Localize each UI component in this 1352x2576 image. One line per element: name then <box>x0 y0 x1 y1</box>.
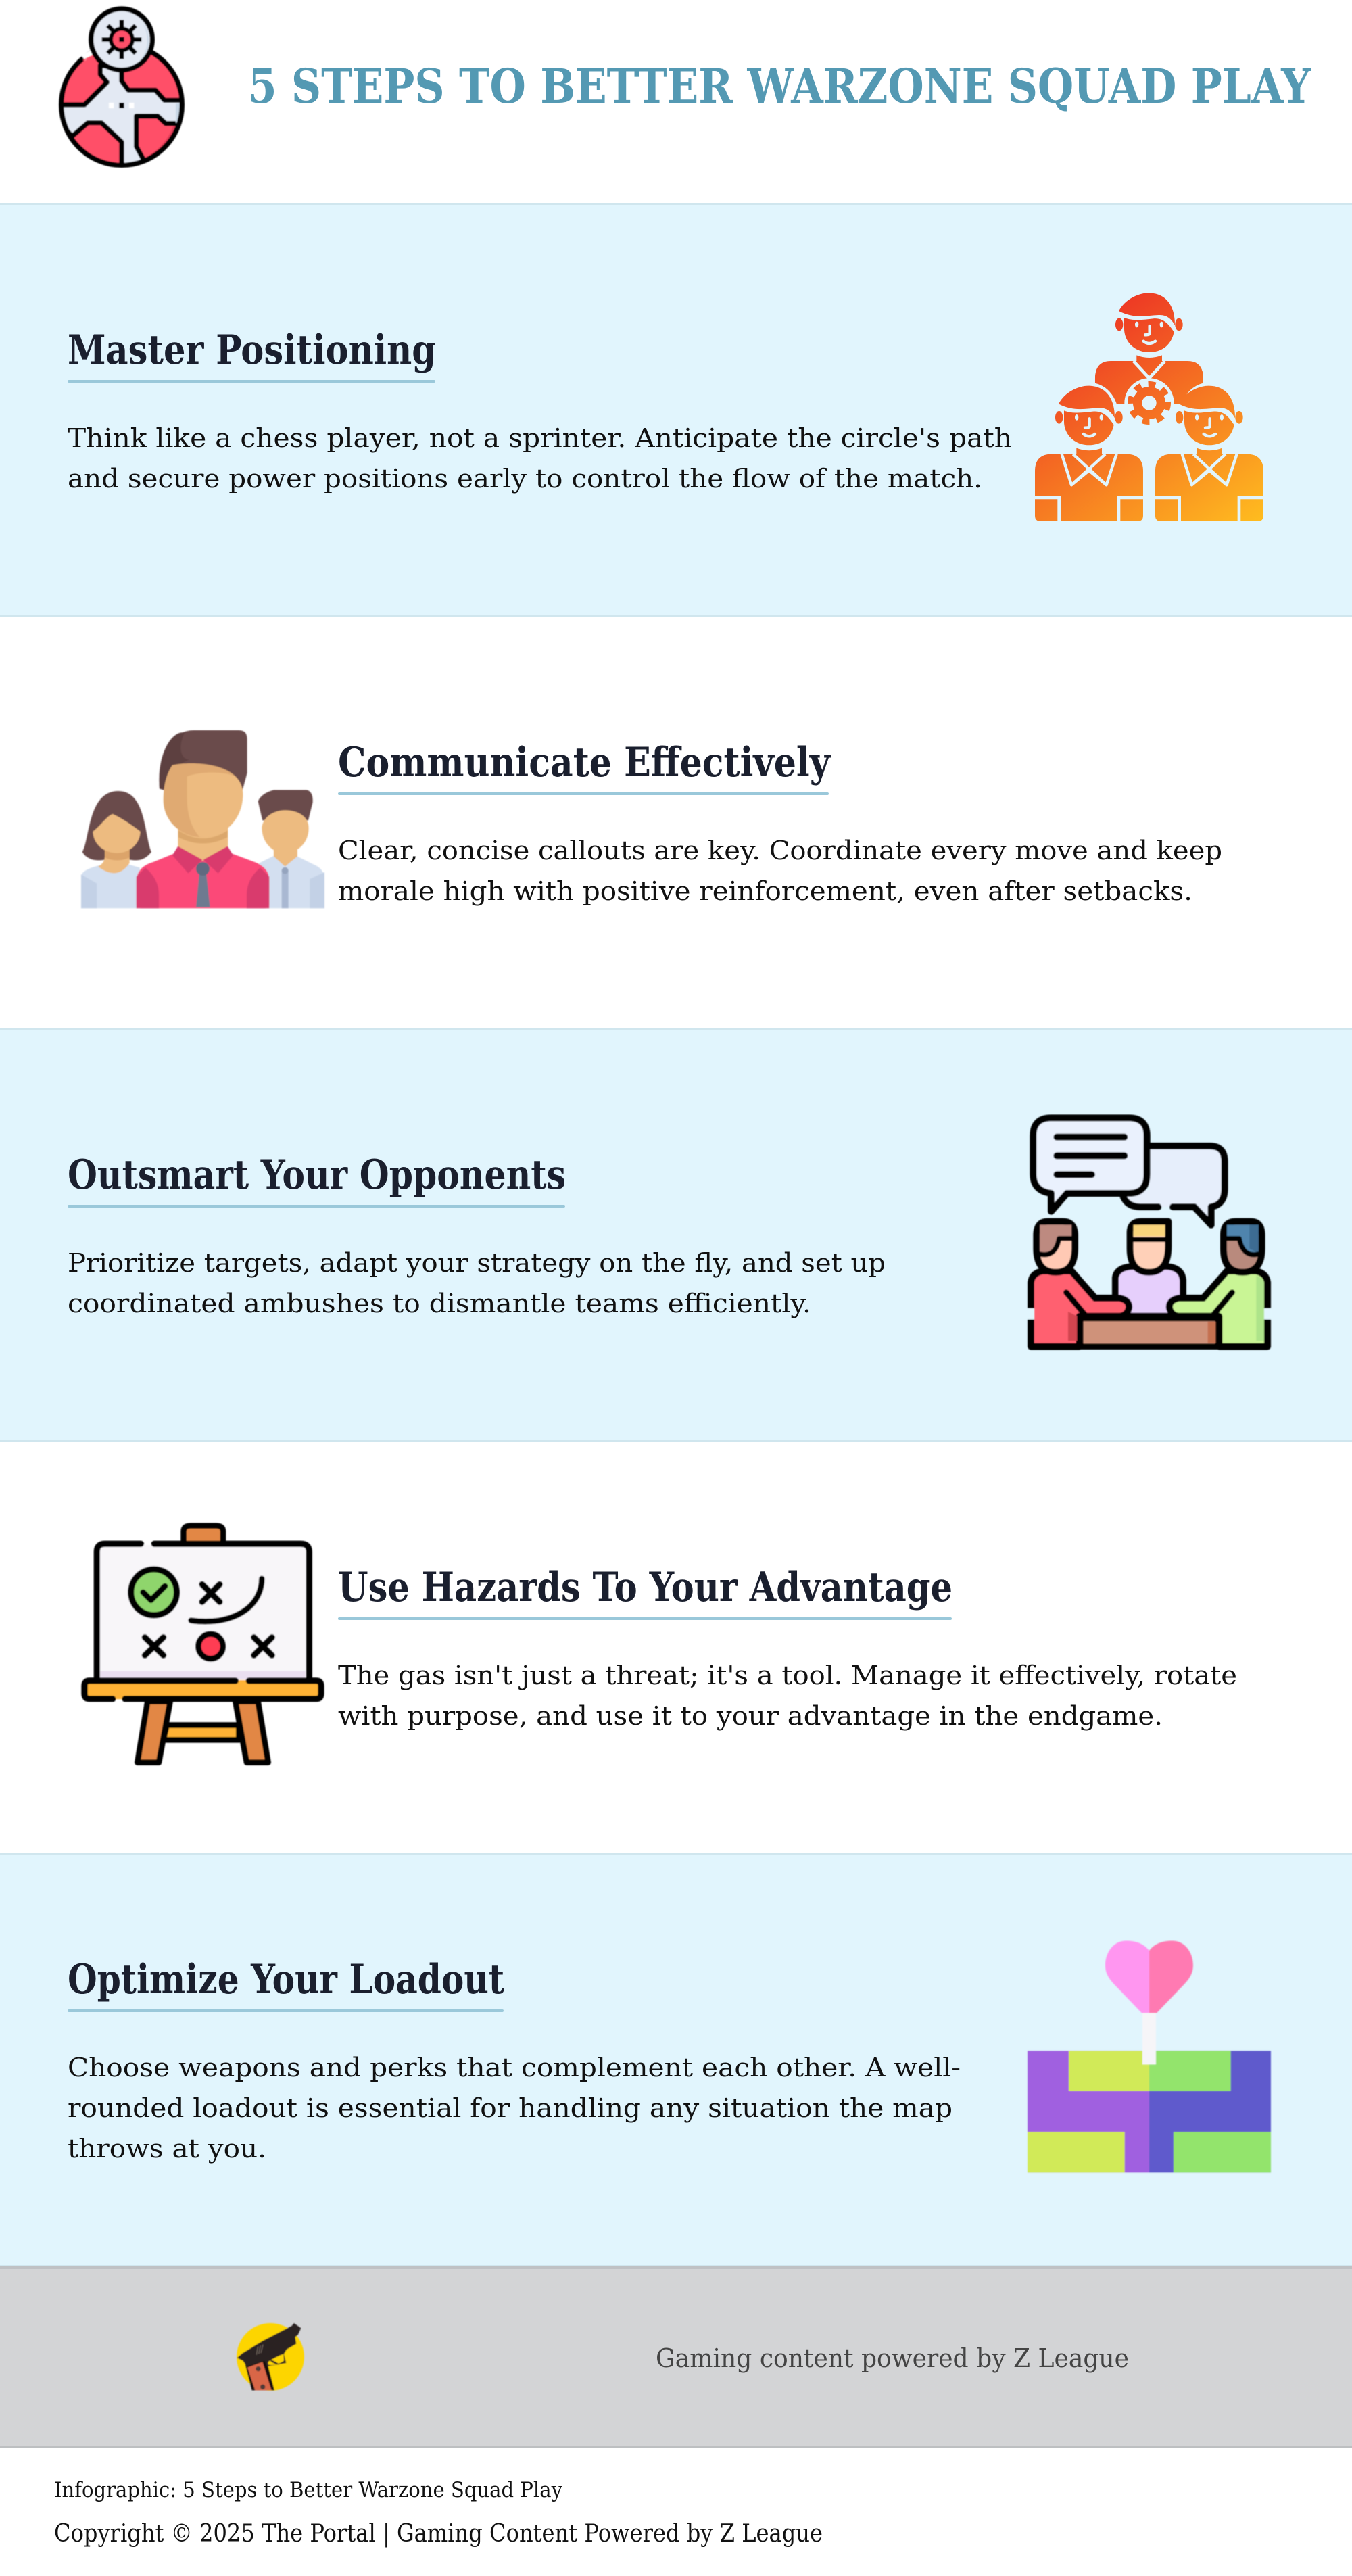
panel: optimize your loadout <box>0 1855 1352 2265</box>
panel: master positioning <box>0 203 1352 617</box>
text block: optimize your loadout: throws at you. <box>68 2134 266 2164</box>
footer credits <box>54 2478 823 2548</box>
text block: optimize your loadout: rounded loadout is essential for handling any situation the map <box>68 2093 952 2124</box>
header <box>59 9 1311 169</box>
heading: master positioning: Master Positioning <box>68 327 436 374</box>
icon: tactics easel <box>84 1526 321 1763</box>
panel: outsmart your opponents <box>0 1030 1352 1442</box>
text block: outsmart your opponents: Prioritize targets, adapt your strategy on the fly, and set up <box>68 1248 886 1279</box>
panel: powered-by footer band <box>0 2265 1352 2448</box>
infographic caption: Infographic: 5 Steps to Better Warzone Squad Play <box>54 2478 562 2502</box>
text block: use hazards: The gas isn't just a threat; it's a tool. Manage it effectively, rotate <box>338 1661 1237 1691</box>
text block: master positioning: and secure power positions early to control the flow of the match. <box>68 464 982 494</box>
text block: master positioning: Think like a chess player, not a sprinter. Anticipate the circle's path <box>68 423 1012 454</box>
text block: communicate effectively: morale high with positive reinforcement, even after setbacks. <box>338 876 1192 907</box>
icon: heart flag on map blocks <box>1028 1941 1271 2172</box>
heading: optimize your loadout: Optimize Your Loadout <box>68 1956 504 2003</box>
powered-by text: Gaming content powered by Z League <box>656 2343 1129 2373</box>
icon: team meeting with speech bubbles <box>1028 1118 1272 1347</box>
text block: outsmart your opponents <box>68 1248 886 1319</box>
icon: globe with virus <box>59 9 185 169</box>
heading: use hazards: Use Hazards To Your Advantage <box>338 1564 952 1611</box>
panel: use hazards to your advantage <box>0 1526 1352 1855</box>
icon: team with gear <box>1035 293 1263 521</box>
text block: optimize your loadout <box>68 2053 961 2164</box>
panel: communicate effectively <box>0 730 1352 1030</box>
heading: communicate effectively: Communicate Effectively <box>338 739 831 786</box>
text block: communicate effectively <box>338 836 1222 907</box>
text block: use hazards <box>338 1661 1237 1732</box>
icon: pistol badge <box>237 2323 304 2391</box>
copyright line: Copyright © 2025 The Portal | Gaming Content Powered by Z League <box>54 2520 823 2548</box>
heading: outsmart your opponents: Outsmart Your Opponents <box>68 1151 566 1199</box>
text block: optimize your loadout: Choose weapons and perks that complement each other. A well- <box>68 2053 961 2083</box>
text block: use hazards: with purpose, and use it to your advantage in the endgame. <box>338 1701 1163 1732</box>
text block: communicate effectively: Clear, concise callouts are key. Coordinate every move and keep <box>338 836 1222 866</box>
text block: master positioning <box>68 423 1012 494</box>
text block: outsmart your opponents: coordinated ambushes to dismantle teams efficiently. <box>68 1289 811 1319</box>
icon: three people <box>81 730 324 908</box>
